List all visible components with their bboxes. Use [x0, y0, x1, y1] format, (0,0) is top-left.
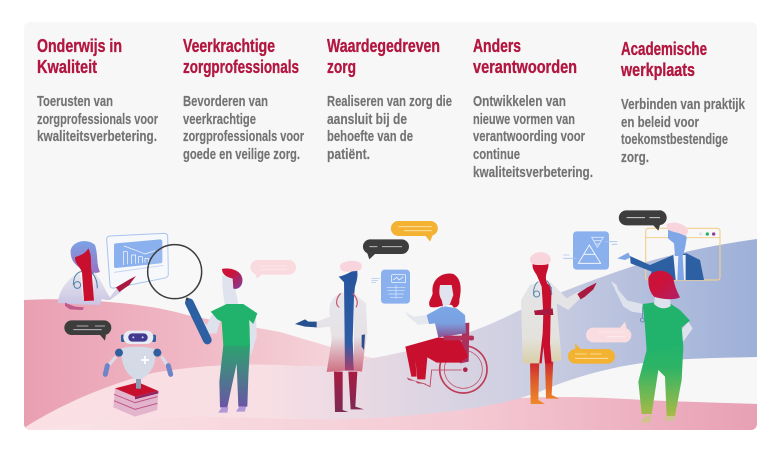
illustration group middle [295, 221, 487, 412]
body text 2: veerkrachtige [183, 111, 256, 128]
heading 2: Veerkrachtige [183, 35, 275, 56]
body text 1: zorgprofessionals voor [37, 111, 158, 128]
x-ray card [371, 270, 410, 304]
body text 5: en beleid voor [621, 114, 699, 131]
doctor with chart [58, 241, 136, 310]
robot on books [105, 331, 171, 417]
heading 2 [183, 35, 299, 77]
body text 3: patiënt. [327, 146, 370, 163]
body text 4: continue [473, 146, 520, 163]
body text 5 [621, 96, 746, 166]
heading 5: werkplaats [620, 59, 695, 80]
heading 4: verantwoorden [473, 56, 577, 77]
body text 1: kwaliteitsverbetering. [37, 128, 157, 145]
heading 1 [37, 35, 122, 77]
body text 2 [183, 93, 304, 163]
heading 1: Onderwijs in [37, 35, 122, 56]
pink speech bubble [586, 322, 631, 342]
orange speech bubble [568, 343, 615, 364]
body text 1 [37, 93, 158, 145]
video call window [617, 223, 720, 280]
heading 3: zorg [327, 56, 356, 77]
background hills [24, 239, 757, 430]
column 2: Veerkrachtige zorgprofessionals [183, 35, 304, 163]
nurse in green [611, 271, 693, 423]
chart screen [107, 233, 168, 288]
heading 3: Waardegedreven [327, 35, 440, 56]
illustration group left [58, 233, 296, 417]
body text 5: zorg. [621, 149, 649, 166]
magnifying glass [148, 245, 207, 340]
body text 3: aansluit bij de [327, 111, 407, 128]
body text 4: Ontwikkelen van [473, 93, 566, 110]
pyramid card [563, 231, 617, 270]
body text 5: Verbinden van praktijk [621, 96, 746, 113]
body text 2: goede en veilige zorg. [183, 146, 300, 163]
heading 4: Anders [473, 35, 521, 56]
pale pink speech bubble [251, 260, 296, 279]
heading 5 [620, 38, 707, 80]
body text 2: zorgprofessionals voor [183, 128, 304, 145]
doctor with stethoscope [295, 261, 367, 412]
body text 3: behoefte van de [327, 128, 413, 145]
body text 1: Toerusten van [37, 93, 113, 110]
body text 3 [327, 93, 452, 163]
man on video call [617, 223, 704, 280]
heading 2: zorgprofessionals [183, 56, 299, 77]
illustration group right [521, 210, 720, 423]
heading 1: Kwaliteit [37, 56, 97, 77]
dark speech bubble [64, 320, 111, 341]
heading 5: Academische [621, 38, 707, 59]
body text 3: Realiseren van zorg die [327, 93, 452, 110]
heading 4 [473, 35, 577, 77]
dark speech bubble [363, 239, 409, 259]
body text 4: kwaliteitsverbetering. [473, 164, 593, 181]
body text 2: Bevorderen van [183, 93, 268, 110]
heading 3 [327, 35, 440, 77]
column 1: Onderwijs in Kwaliteit [37, 35, 158, 145]
orange speech bubble [391, 221, 438, 242]
column 3: Waardegedreven zorg [327, 35, 452, 163]
body text 4: verantwoording voor [473, 128, 585, 145]
body text 4: nieuwe vormen van [473, 111, 575, 128]
column 4: Anders verantwoorden [473, 35, 593, 181]
woman in wheelchair [405, 274, 487, 393]
body text 5: toekomstbestendige [621, 131, 728, 148]
dark speech bubble [619, 210, 667, 231]
column 5: Academische werkplaats [620, 38, 746, 166]
body text 4 [473, 93, 593, 181]
doctor with red skin tone [521, 252, 597, 404]
man in green shirt [193, 268, 257, 413]
